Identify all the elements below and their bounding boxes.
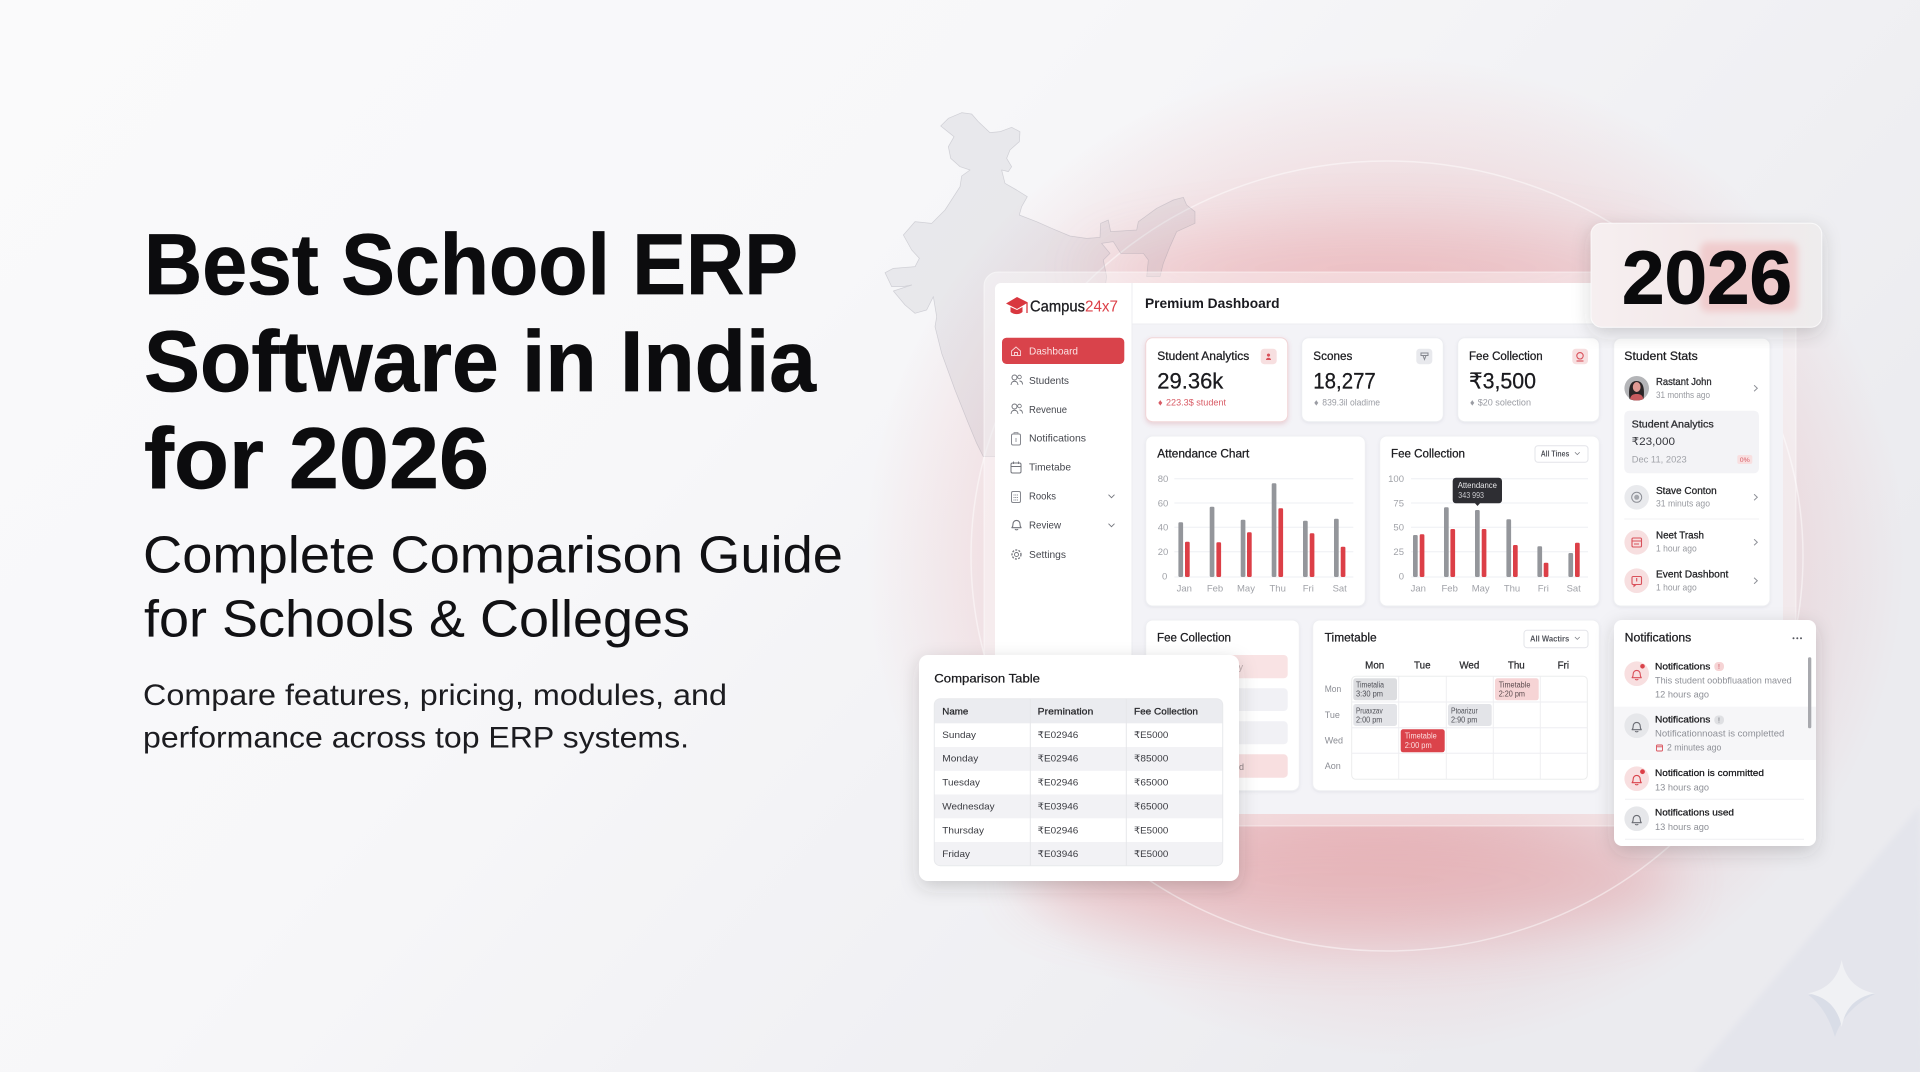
inner card: student analytics: Dec 11, 2023 <box>1632 454 1687 465</box>
table: ₹E02946 <box>1038 730 1078 741</box>
sidebar navigation <box>1002 338 1124 561</box>
panel: timetable <box>1313 620 1599 791</box>
row: event dashbont: 1 hour ago <box>1656 582 1697 592</box>
panel: fee collection list: Today <box>1219 662 1243 672</box>
panel: timetable: Wed <box>1325 736 1343 746</box>
dropdown: all wactirs <box>1524 630 1588 648</box>
bar chart: attendance chart: 20 <box>1158 547 1168 558</box>
nav item: dashboard active <box>1002 338 1124 364</box>
bar chart: attendance chart: Thu <box>1270 584 1286 595</box>
tooltip <box>1453 478 1502 506</box>
nav item: timetable: Timetabe <box>1029 463 1071 474</box>
panel: timetable: Wed <box>1459 661 1479 672</box>
bar chart: fee collection: 0 <box>1399 572 1404 582</box>
event: timetable red <box>1401 729 1445 752</box>
nav item: settings <box>1012 550 1066 561</box>
row: stave conton: 31 minuts ago <box>1656 499 1710 509</box>
bar chart: fee collection: Sat <box>1567 584 1581 595</box>
stat card: scones: ♦ <box>1314 398 1319 408</box>
table: ₹E03946 <box>1038 801 1078 812</box>
notification: item four: Notifications used <box>1655 808 1734 819</box>
nav item: timetable <box>1011 462 1071 474</box>
dropdown: all times: All Tines <box>1541 449 1570 458</box>
stat card: scones: Scones <box>1313 351 1353 363</box>
table: ₹85000 <box>1134 754 1168 765</box>
nav item: dashboard active: Dashboard <box>1029 346 1078 357</box>
table <box>934 699 1223 866</box>
stat card: student analytics: 223.3$ student <box>1166 398 1226 409</box>
panel: timetable: Mon <box>1365 661 1384 672</box>
nav item: rooks: Rooks <box>1029 492 1056 503</box>
notification: item one: Notifications <box>1655 661 1711 672</box>
subtitle: for Schools & Colleges <box>144 590 690 648</box>
panel: student stats: Rastant John <box>1656 377 1712 388</box>
table: Fee Collection <box>1134 706 1198 717</box>
notification: item four <box>1624 806 1734 832</box>
panel: timetable: Aon <box>1325 761 1341 771</box>
bar chart: attendance chart: Attendance Chart <box>1157 448 1250 460</box>
panel: comparison table: Comparison Table <box>934 671 1040 685</box>
notification: item three <box>1624 766 1764 793</box>
bar chart: fee collection: Fee Collection <box>1391 448 1465 460</box>
event: timetalia: Timetalia <box>1356 680 1385 689</box>
title: Software in India <box>144 314 817 410</box>
logo: Campus <box>1030 299 1085 316</box>
event: pruaxzav: 2:00 pm <box>1356 716 1383 725</box>
stat card: scones: 18,277 <box>1313 368 1376 393</box>
notification: item two: 2 minutes ago <box>1667 743 1721 753</box>
tooltip: 343 993 <box>1458 491 1484 500</box>
inner card: student analytics <box>1624 411 1759 473</box>
row: stave conton <box>1624 485 1757 510</box>
table: Wednesday <box>942 801 995 812</box>
panel: dashboard frame <box>984 272 1796 826</box>
panel: fee collection list: Fee Collection <box>1157 633 1231 645</box>
notification: item two: Notificationnoast is completted <box>1655 729 1784 739</box>
notification: item four: 13 hours ago <box>1655 822 1709 832</box>
table: ₹65000 <box>1134 778 1168 789</box>
table: Tuesday <box>942 778 980 789</box>
nav item: notifications <box>1012 433 1086 445</box>
event: timetable red: Timetable <box>1405 732 1437 741</box>
notification: item two: ! <box>1718 718 1720 724</box>
table: Sunday <box>942 730 976 741</box>
logo: 24x7 <box>1085 299 1118 316</box>
icon: avatar <box>1624 376 1649 401</box>
bar chart: attendance chart: May <box>1237 584 1255 595</box>
dashboard heading: Premium Dashboard <box>1145 295 1280 311</box>
notification: item two <box>1624 713 1784 753</box>
nav item: notifications: Notifications <box>1029 434 1086 445</box>
nav item: rooks <box>1012 492 1114 503</box>
stat card: fee collection: ♦ <box>1470 398 1475 408</box>
subtitle <box>143 526 843 648</box>
table: ₹E02946 <box>1038 825 1078 836</box>
notification: item one: ! <box>1718 664 1720 671</box>
nav item: revenue <box>1011 404 1067 416</box>
bar chart: fee collection: May <box>1472 584 1490 595</box>
notification: item one <box>1624 661 1792 699</box>
stat card: scones <box>1302 338 1443 422</box>
panel: timetable: Mon <box>1325 684 1341 694</box>
stat card: student analytics: 29.36k <box>1157 368 1224 393</box>
inner card: student analytics: ₹23,000 <box>1632 436 1675 448</box>
stat card: student analytics: ♦ <box>1158 398 1163 408</box>
bar chart: fee collection: Fri <box>1538 584 1549 595</box>
bar chart: attendance chart: 0 <box>1162 572 1167 582</box>
row: event dashbont: Event Dashbont <box>1656 570 1729 581</box>
bar chart: fee collection: Jan <box>1411 584 1426 595</box>
notification: item one: This student oobbfluaation maved <box>1655 675 1792 685</box>
nav item: students <box>1011 375 1069 387</box>
event: timetable thu: Timetable <box>1499 680 1530 689</box>
icon: india map silhouette <box>885 113 1195 457</box>
stat card: scones: 839.3il oladime <box>1322 398 1380 409</box>
panel: comparison table <box>919 655 1239 881</box>
bar chart: attendance chart: 80 <box>1158 474 1168 485</box>
bar chart: attendance chart: Fri <box>1303 584 1314 595</box>
row: stave conton: Stave Conton <box>1656 486 1717 497</box>
icon: sparkle watermark <box>1808 960 1875 1037</box>
bar chart: fee collection: 100 <box>1388 474 1404 485</box>
bar chart: fee collection: Feb <box>1442 584 1458 595</box>
title <box>144 217 817 507</box>
bar chart: attendance chart: Sat <box>1333 584 1347 595</box>
table: Friday <box>942 849 970 860</box>
logo <box>1006 297 1118 316</box>
table: ₹E02946 <box>1038 754 1078 765</box>
panel: timetable: Thu <box>1508 661 1525 672</box>
bar chart: attendance chart: Feb <box>1207 584 1223 595</box>
notification: item three: Notification is committed <box>1655 768 1764 779</box>
dropdown: all times <box>1535 446 1588 462</box>
event: pruaxzav: Pruaxzav <box>1356 706 1383 715</box>
bar chart: attendance chart: Jan <box>1177 584 1192 595</box>
table: Monday <box>942 754 979 765</box>
event: timetalia <box>1353 678 1397 700</box>
nav item: review: Review <box>1029 521 1062 532</box>
event: timetalia: 3:30 pm <box>1356 690 1383 699</box>
panel: timetable: Tue <box>1414 661 1431 672</box>
stat card: student analytics <box>1146 338 1288 422</box>
bar chart: attendance chart: 40 <box>1158 523 1168 534</box>
event: ptoarizur: 2:90 pm <box>1451 716 1478 725</box>
notification: item three: 13 hours ago <box>1655 783 1709 793</box>
title: Best School ERP <box>144 217 798 313</box>
panel: timetable: Tue <box>1325 710 1340 720</box>
table: ₹65000 <box>1134 801 1168 812</box>
subtitle: Complete Comparison Guide <box>143 526 843 584</box>
nav item: students: Students <box>1029 376 1069 387</box>
table: Name <box>942 706 968 717</box>
table: ₹E5000 <box>1134 849 1168 860</box>
stat card: fee collection <box>1458 338 1599 422</box>
bar chart: fee collection: Thu <box>1504 584 1520 595</box>
row: neet trash: 1 hour ago <box>1656 544 1697 554</box>
panel: timetable: Timetable <box>1325 633 1377 645</box>
inner card: student analytics: Student Analytics <box>1632 419 1714 430</box>
stat card: fee collection: Fee Collection <box>1469 351 1543 363</box>
panel: fee collection list: Completed <box>1200 762 1244 772</box>
panel: notifications: Notifications <box>1625 633 1692 645</box>
description text: performance across top ERP systems. <box>143 722 689 754</box>
stat card: student analytics: Student Analytics <box>1157 351 1250 363</box>
event: timetable thu <box>1495 678 1539 700</box>
description text <box>143 679 727 754</box>
panel: student stats <box>1614 338 1770 606</box>
stat card: fee collection: ₹3,500 <box>1469 368 1536 393</box>
bar chart: fee collection: 25 <box>1393 547 1404 558</box>
notification: item two: Notifications <box>1655 715 1711 726</box>
panel: student stats: 31 months ago <box>1656 390 1710 400</box>
bar chart: fee collection: 75 <box>1393 498 1404 509</box>
description text: Compare features, pricing, modules, and <box>143 679 727 712</box>
bar chart: attendance chart <box>1146 436 1365 606</box>
row: event dashbont <box>1624 568 1757 593</box>
table: ₹E03946 <box>1038 849 1078 860</box>
panel: notifications <box>1614 620 1816 846</box>
notification: item one: 12 hours ago <box>1655 689 1709 699</box>
table: ₹E5000 <box>1134 730 1168 741</box>
panel: student stats: Student Stats <box>1624 351 1698 363</box>
table: ₹E02946 <box>1038 778 1078 789</box>
table: ₹E5000 <box>1134 825 1168 836</box>
tooltip: Attendance <box>1458 480 1497 490</box>
event: ptoarizur: Ptoarizur <box>1451 706 1478 715</box>
bar chart: fee collection <box>1380 436 1599 606</box>
panel: timetable: Fri <box>1558 661 1569 672</box>
nav item: settings: Settings <box>1029 550 1066 561</box>
event: pruaxzav <box>1353 704 1397 726</box>
table: Premination <box>1038 706 1093 717</box>
stat card: fee collection: $20 solection <box>1478 398 1531 409</box>
dropdown: all wactirs: All Wactirs <box>1530 634 1570 643</box>
bar chart: attendance chart: 60 <box>1158 498 1168 509</box>
event: timetable red: 2:00 pm <box>1405 741 1432 750</box>
inner card: student analytics: 0% <box>1740 457 1750 464</box>
nav item: review <box>1012 520 1114 532</box>
badge: 2026: 2026 <box>1622 235 1792 319</box>
row: neet trash: Neet Trash <box>1656 531 1704 542</box>
event: ptoarizur <box>1448 704 1492 726</box>
title: for 2026 <box>144 411 489 507</box>
icon: graduation cap <box>1006 297 1028 314</box>
bar chart: fee collection: 50 <box>1393 523 1404 534</box>
table: Thursday <box>942 825 984 836</box>
row: neet trash <box>1624 530 1757 555</box>
panel: fee collection list <box>1146 620 1299 791</box>
nav item: revenue: Revenue <box>1029 405 1067 416</box>
event: timetable thu: 2:20 pm <box>1499 690 1525 699</box>
badge: 2026 <box>1591 223 1822 327</box>
